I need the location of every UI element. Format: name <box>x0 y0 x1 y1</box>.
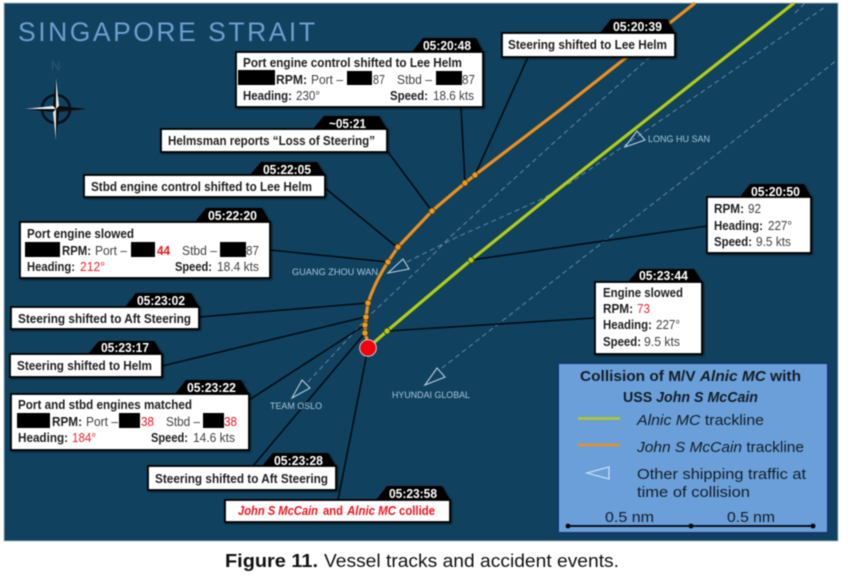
callout: 05:22:20: 18.4 kts <box>217 259 259 274</box>
callout: 05:23:44: Speed: <box>603 334 641 349</box>
callout: 05:23:22: 14.6 kts <box>193 430 235 445</box>
callout: 05:22:05 <box>84 162 325 197</box>
callout: ~05:21: ~05:21 <box>329 116 366 131</box>
callout: 05:22:20: Stbd – <box>182 243 218 258</box>
callout: 05:22:20: 05:22:20 <box>208 208 257 223</box>
callout: 05:23:22: 38 <box>141 414 154 429</box>
callout: 05:23:02: 05:23:02 <box>137 293 185 308</box>
callout: 05:22:20: Speed: <box>175 259 212 274</box>
callout: 05:23:44: 227° <box>656 317 680 332</box>
callout: 05:23:44: 9.5 kts <box>644 334 680 349</box>
callout: 05:20:50: 9.5 kts <box>756 234 791 249</box>
callout: 05:22:05: 05:22:05 <box>263 162 311 177</box>
legend: John S McCain trackline: John S McCain trackline <box>636 439 804 456</box>
legend heading <box>580 368 801 406</box>
callout: 05:20:50: 227° <box>768 218 792 233</box>
callout: 05:23:22: 184° <box>72 430 96 445</box>
callout: 05:23:58: and <box>323 503 343 518</box>
callout: 05:23:22 <box>11 380 249 450</box>
callout: 05:23:58: John S McCain <box>238 503 318 518</box>
ship: Hyundai Global: HYUNDAI GLOBAL <box>392 390 470 400</box>
callout: 05:20:39: 05:20:39 <box>613 19 662 34</box>
callout: 05:20:48: Speed: <box>390 88 428 103</box>
callout: 05:22:05: Stbd engine control shifted to Lee Helm <box>91 179 312 194</box>
callout: 05:23:02: Steering shifted to Aft Steering <box>18 311 191 326</box>
callout: 05:23:44 <box>595 268 702 354</box>
callout: 05:23:22: 05:23:22 <box>187 380 236 395</box>
title: SINGAPORE STRAIT <box>18 17 315 47</box>
callout: ~05:21: Helmsman reports “Loss of Steering” <box>168 133 375 148</box>
ship: Team Oslo <box>270 380 322 411</box>
callout: 05:23:58: collide <box>399 503 435 518</box>
callout: 05:23:28 <box>148 453 336 490</box>
callout: 05:20:48: Port – <box>311 72 344 87</box>
collision point <box>360 340 376 356</box>
callout: 05:20:50 <box>707 184 811 253</box>
ship: Team Oslo: TEAM OSLO <box>270 401 322 411</box>
callout: 05:23:28: 05:23:28 <box>274 453 323 468</box>
compass rose <box>25 58 87 140</box>
legend: other shipping traffic <box>587 466 807 501</box>
callout: 05:20:48: Heading: <box>243 88 292 103</box>
ship: Long Hu San <box>625 131 710 147</box>
callout: 05:22:20: Port – <box>95 243 128 258</box>
callout: 05:23:22: Port and stbd engines matched <box>18 397 192 412</box>
callout: 05:22:20: RPM: <box>62 243 91 258</box>
callout: 05:20:50: 92 <box>748 201 761 216</box>
legend heading: USS John S McCain <box>623 389 758 406</box>
figure caption: Vessel tracks and accident events. <box>324 551 619 571</box>
callout: 05:23:22: Stbd – <box>166 414 201 429</box>
Alnic MC trackline <box>368 3 794 348</box>
callout: 05:23:44: 73 <box>637 301 650 316</box>
callout: 05:23:02 <box>11 293 199 329</box>
callout: 05:23:22: RPM: <box>52 414 82 429</box>
callout: 05:22:20: 212° <box>80 259 105 274</box>
legend heading: Collision of M/V Alnic MC with <box>580 368 801 385</box>
callout: 05:20:48: Stbd – <box>397 72 433 87</box>
callout: 05:20:50: Heading: <box>714 218 763 233</box>
callout: 05:23:44: Heading: <box>603 317 652 332</box>
ship: Long Hu San: LONG HU SAN <box>648 134 710 144</box>
compass rose: N <box>51 58 60 73</box>
scale bar: 0.5 nm <box>727 509 775 526</box>
panel: legend <box>558 363 828 533</box>
callout: 05:20:50: RPM: <box>714 201 744 216</box>
callout: 05:20:39: Steering shifted to Lee Helm <box>508 37 667 52</box>
callout: 05:23:28: Steering shifted to Aft Steering <box>155 471 328 486</box>
callout: 05:20:48: 05:20:48 <box>423 38 471 53</box>
callout: 05:23:17 <box>10 340 162 377</box>
callout: 05:23:22: Port – <box>86 414 119 429</box>
callout: 05:23:44: 05:23:44 <box>639 268 689 283</box>
callout: 05:23:22: Heading: <box>18 430 68 445</box>
John S McCain trackline <box>365 3 695 343</box>
scale bar: 0.5 nm <box>605 509 654 526</box>
callout: 05:22:20 <box>20 208 270 278</box>
legend: other shipping traffic: time of collision <box>637 484 750 501</box>
callout: 05:20:48: 230° <box>296 88 320 103</box>
callout: 05:23:17: Steering shifted to Helm <box>17 358 152 373</box>
callout: 05:23:44: Engine slowed <box>603 285 683 300</box>
ship: Hyundai Global <box>392 368 470 400</box>
ship: Guang Zhou Wan: GUANG ZHOU WAN <box>292 267 378 277</box>
callout: 05:23:58: 05:23:58 <box>389 486 437 501</box>
callout: 05:22:20: Heading: <box>27 259 75 274</box>
callout: 05:20:39 <box>502 19 675 57</box>
callout: 05:22:20: 87 <box>246 243 259 258</box>
callout: 05:23:58 <box>225 486 450 522</box>
ship: Guang Zhou Wan <box>292 259 409 277</box>
callout: 05:20:48: 87 <box>373 72 385 87</box>
callout: 05:20:48: 87 <box>462 72 475 87</box>
callout: 05:20:48: Port engine control shifted to Lee Helm <box>243 55 462 70</box>
callout: 05:23:58: Alnic MC <box>346 503 397 518</box>
callout: 05:20:50: 05:20:50 <box>751 184 800 199</box>
callout: 05:20:48: 18.6 kts <box>433 88 474 103</box>
legend: Alnic MC trackline: Alnic MC trackline <box>636 412 764 429</box>
callout: 05:22:20: 44 <box>157 243 171 258</box>
leader lines <box>162 57 707 500</box>
callout: 05:23:17: 05:23:17 <box>101 340 149 355</box>
figure caption: Figure 11. <box>225 551 318 571</box>
callout: 05:20:50: Speed: <box>714 234 752 249</box>
legend: other shipping traffic: Other shipping traffic at <box>637 466 807 483</box>
callout: 05:22:20: Port engine slowed <box>27 226 134 241</box>
track event markers <box>362 172 478 336</box>
callout: 05:20:48 <box>236 38 483 107</box>
callout: 05:20:48: RPM: <box>276 72 307 87</box>
callout: 05:23:44: RPM: <box>603 301 633 316</box>
callout: 05:23:22: Speed: <box>151 430 188 445</box>
callout: ~05:21 <box>161 116 387 152</box>
callout: 05:23:22: 38 <box>224 414 237 429</box>
scale bar <box>566 509 815 528</box>
